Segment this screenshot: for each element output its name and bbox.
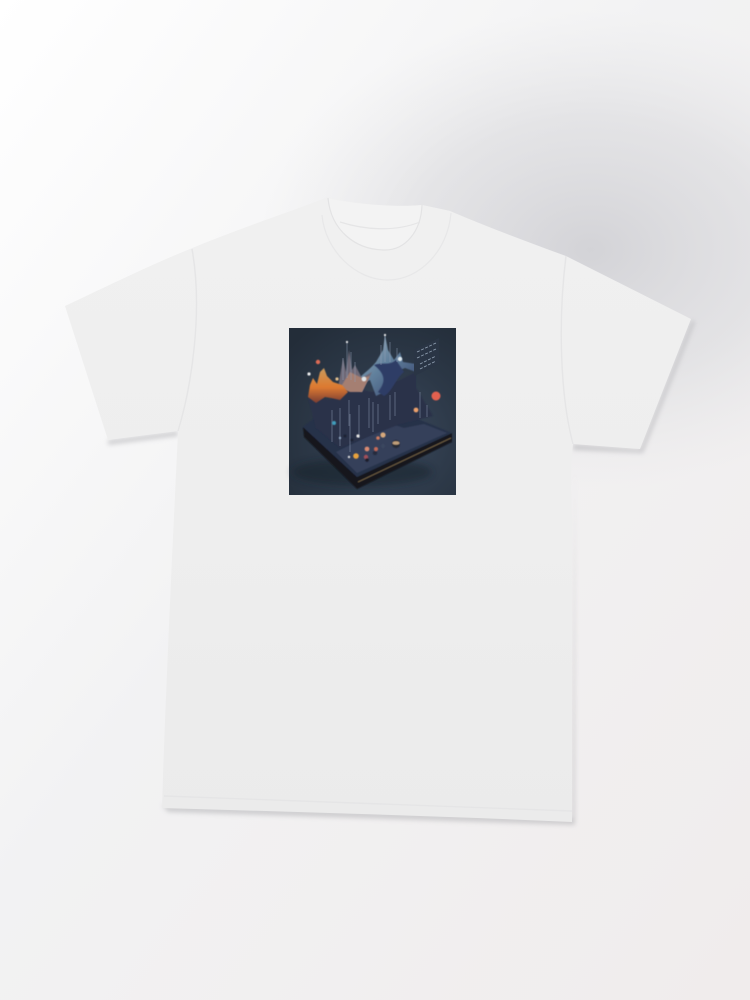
sleeve seams [164, 249, 573, 811]
print background [289, 328, 456, 495]
platform [303, 398, 452, 489]
t-shirt [65, 197, 691, 822]
blue mountain [352, 335, 416, 396]
orange mountain [308, 368, 348, 403]
mauve mountain [337, 350, 372, 395]
spheres [307, 334, 440, 462]
data spikes [332, 335, 427, 452]
back data panel [308, 372, 433, 448]
inner neck [328, 198, 422, 250]
floating screen [414, 338, 439, 376]
platform shadow [292, 458, 432, 486]
printed graphic [289, 328, 456, 495]
collar [327, 197, 450, 274]
t-shirt shadow [108, 320, 695, 825]
shirt body and sleeves [65, 197, 691, 822]
collar seams [322, 198, 451, 280]
mauve glow [340, 372, 370, 392]
blue ridge [374, 360, 404, 396]
